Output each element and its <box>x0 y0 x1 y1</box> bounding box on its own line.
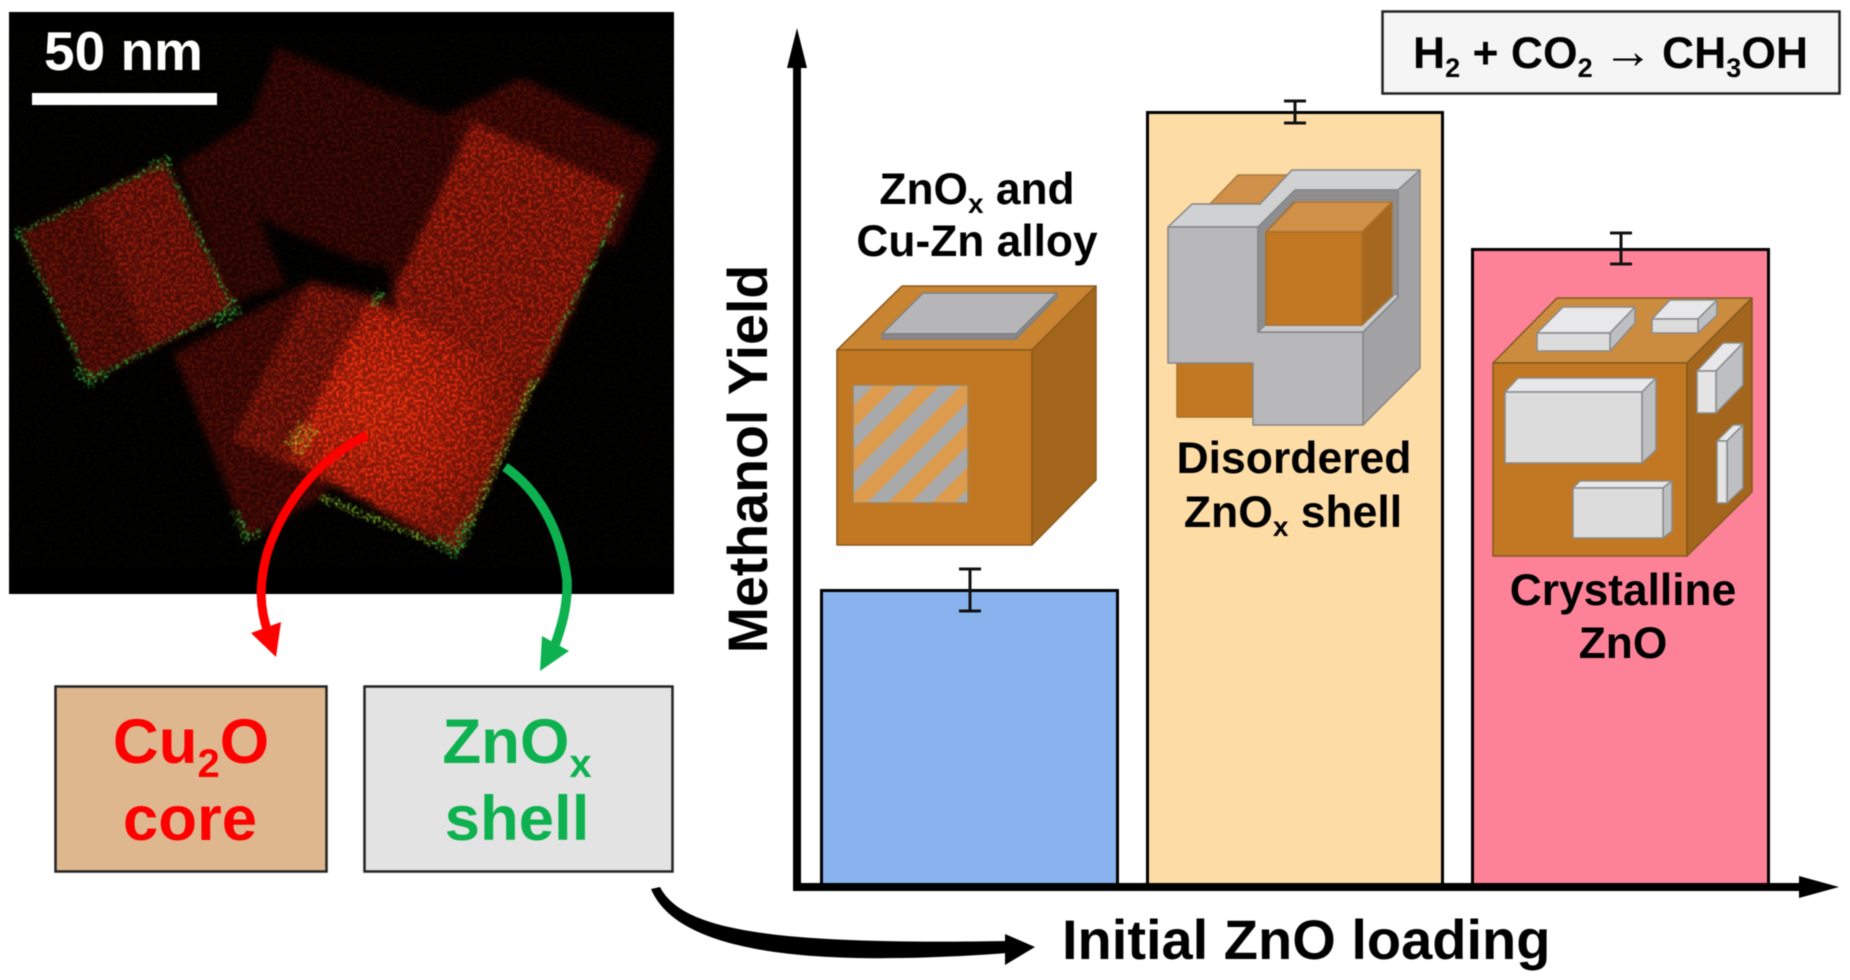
y axis with arrow <box>787 28 807 891</box>
equation text: 3 <box>1726 53 1741 83</box>
label: ZnOx and Cu-Zn alloy: and <box>984 165 1075 214</box>
box: Cu2O core <box>56 686 326 872</box>
inner copper oxide cube <box>1266 202 1392 325</box>
box: ZnOx shell <box>364 686 672 872</box>
label: Cu2O core: O <box>220 707 269 777</box>
equation text: → <box>1603 23 1653 79</box>
equation text: 2 <box>1578 53 1593 83</box>
equation text: CH <box>1662 29 1726 78</box>
icon: cube with disordered shell <box>1168 170 1420 425</box>
error bar <box>1284 101 1306 123</box>
label: ZnOx shell: shell <box>445 784 589 854</box>
label: Cu2O core: Cu <box>113 707 198 777</box>
bar: low ZnO loading <box>822 569 1118 886</box>
label: ZnOx and Cu-Zn alloy: Cu-Zn alloy <box>856 217 1098 266</box>
equation text: OH <box>1741 29 1808 78</box>
scale bar label: 50 nm <box>44 20 203 82</box>
scale bar <box>32 93 217 105</box>
icon: cube with ZnOx patch and alloy <box>837 286 1096 545</box>
equation text: 2 <box>1445 53 1460 83</box>
label: Cu2O core <box>113 707 269 854</box>
equation box <box>1382 12 1840 94</box>
crystallites <box>1505 300 1743 538</box>
bar: high ZnO loading <box>1472 233 1768 886</box>
y axis title: Methanol Yield <box>717 265 779 653</box>
label: ZnOx and Cu-Zn alloy: ZnO <box>879 165 968 214</box>
x axis title: Initial ZnO loading <box>1062 908 1550 971</box>
label: ZnOx and Cu-Zn alloy <box>856 165 1098 266</box>
label: Cu2O core: core <box>123 784 257 854</box>
label: Cu2O core: 2 <box>198 742 220 786</box>
micrograph background <box>9 12 674 594</box>
core-shell nanocubes <box>20 48 658 552</box>
bar: medium ZnO loading <box>1148 101 1442 886</box>
label: Crystalline ZnO: ZnO <box>1579 619 1667 668</box>
label: Disordered ZnOx shell <box>1177 434 1411 542</box>
label: ZnOx and Cu-Zn alloy: x <box>968 188 984 219</box>
label: ZnOx shell: x <box>569 742 592 786</box>
label: Disordered ZnOx shell: shell <box>1288 488 1402 537</box>
alloy hatched patch <box>853 385 968 503</box>
equation text: + CO <box>1460 29 1578 78</box>
green shell speckle <box>20 161 625 552</box>
equation text: H <box>1413 29 1445 78</box>
label: ZnOx shell: ZnO <box>442 707 569 777</box>
ZnOx plate on top <box>882 293 1057 339</box>
label: ZnOx shell <box>442 707 592 854</box>
panel: EDS micrograph <box>9 12 674 594</box>
error bar <box>959 569 981 611</box>
label: Disordered ZnOx shell: x <box>1273 511 1289 542</box>
label: Disordered ZnOx shell: ZnO <box>1184 488 1273 537</box>
arrow: red to core <box>251 435 367 657</box>
icon: cube with crystalline ZnO blocks <box>1493 298 1752 556</box>
label: Crystalline ZnO <box>1510 566 1736 668</box>
label: Crystalline ZnO: Crystalline <box>1510 566 1736 615</box>
label: Disordered ZnOx shell: Disordered <box>1177 434 1411 483</box>
error bar <box>1610 233 1632 264</box>
arrow: to x axis <box>651 887 1035 965</box>
x axis with arrow <box>793 876 1839 898</box>
arrow: green to shell <box>505 467 569 671</box>
